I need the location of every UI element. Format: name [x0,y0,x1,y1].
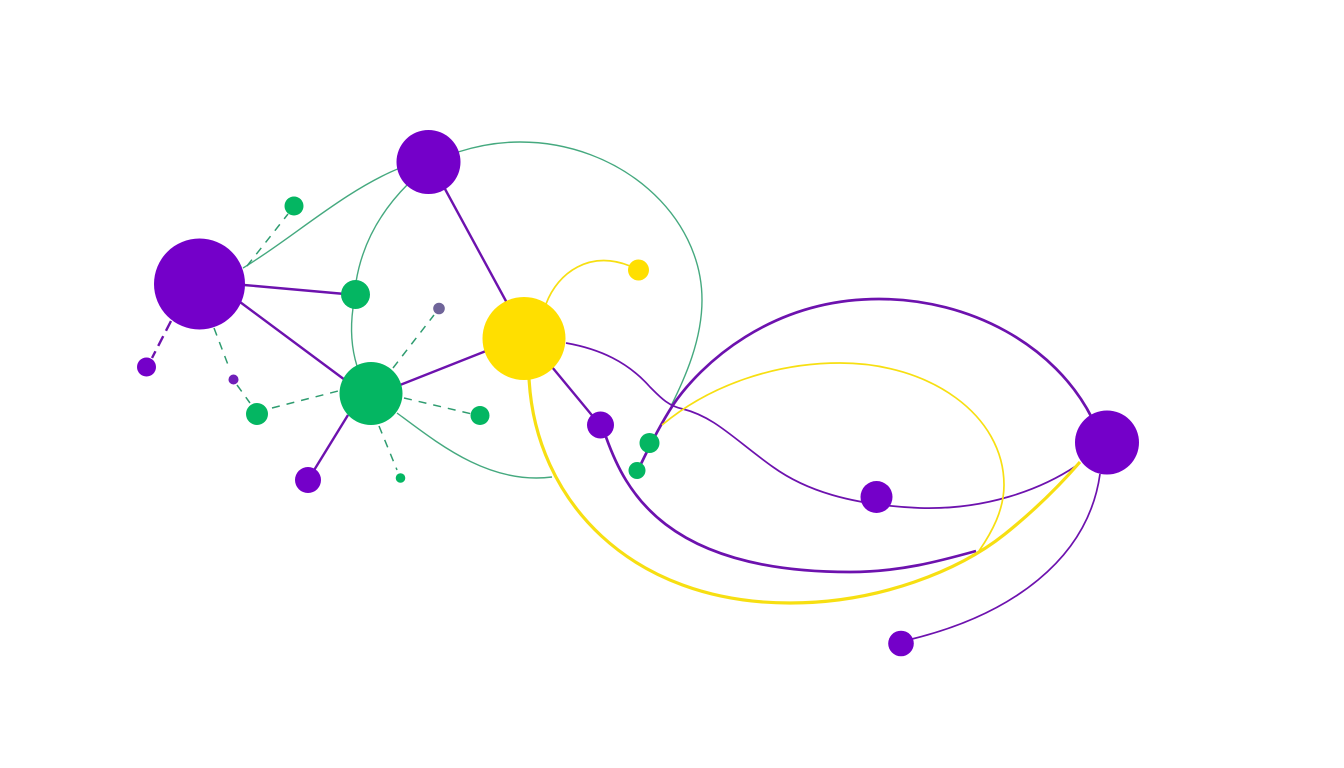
node: right purple [1075,410,1139,474]
node: top purple [396,130,460,194]
node: purple far left [137,358,156,376]
node: purple bottom [888,631,914,656]
node: green right [470,406,490,425]
node: central green [340,362,402,425]
purple dashed link [152,321,171,358]
node: small purple [228,374,238,384]
green dashed links [214,214,472,470]
node: purple middle [587,412,614,438]
node: green top-left [284,196,304,216]
yellow curved links [529,261,1080,603]
node: purple lower centre [860,481,892,513]
node: central yellow [482,297,566,380]
purple straight links [240,189,600,480]
node: green upper [341,280,370,309]
green curved links [243,142,702,478]
node: green middle lower [628,462,646,479]
node: green middle upper [640,433,660,453]
node: purple bottom-left [295,467,321,493]
node: green left [246,403,268,425]
node: large purple [154,238,245,330]
node: small yellow [628,260,649,280]
purple curved links [566,299,1100,639]
node: small green bottom [396,473,405,483]
node: small slate [433,303,445,314]
